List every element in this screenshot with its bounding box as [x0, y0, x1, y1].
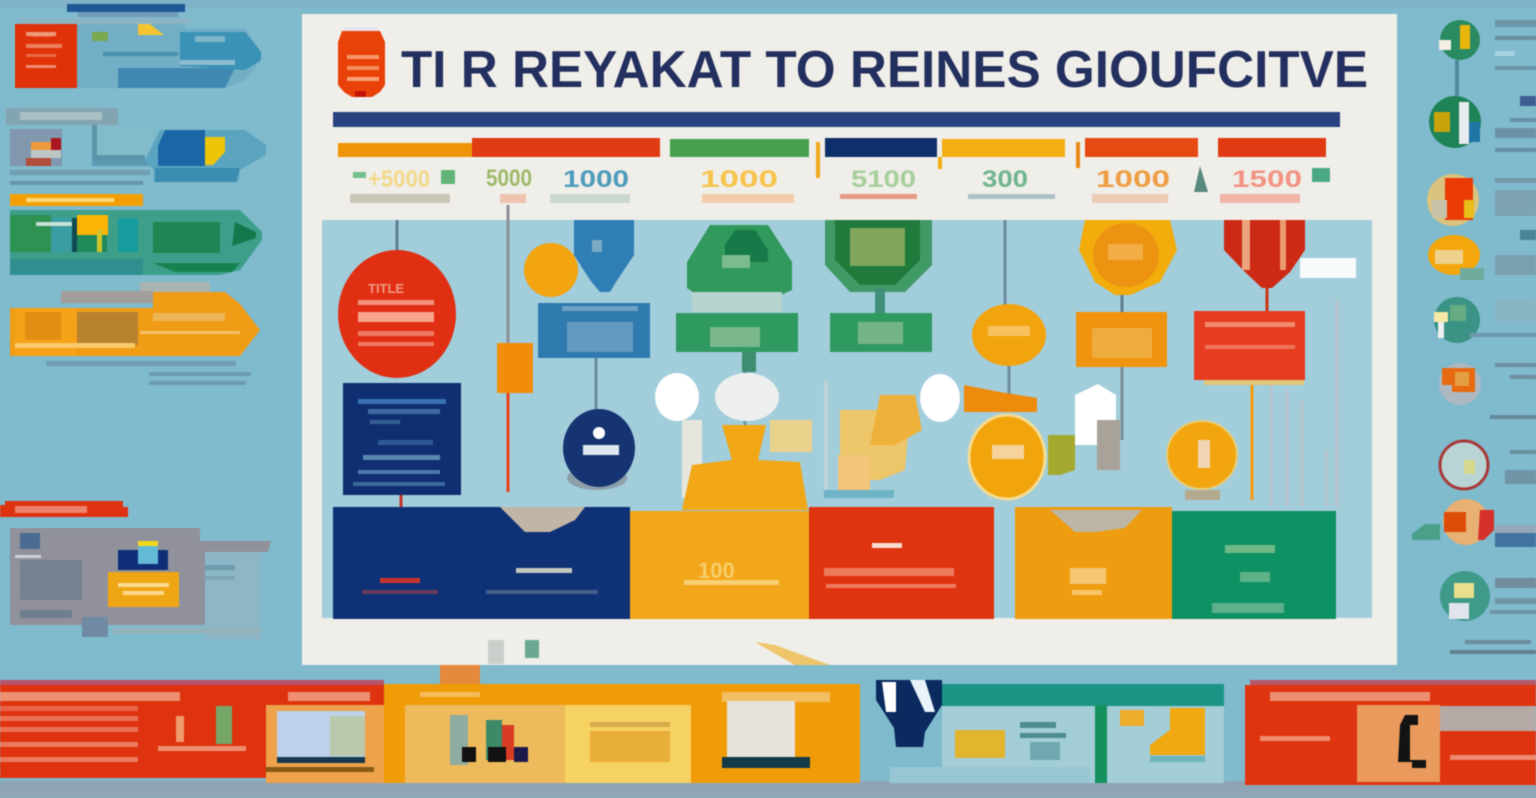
panel: bottom red section right — [1245, 680, 1536, 785]
header tabs — [338, 138, 1326, 178]
tab three — [670, 139, 809, 157]
icon: navy shield — [876, 680, 942, 747]
panel: bottom amber section — [384, 665, 860, 783]
panel: main sheet — [302, 14, 1397, 665]
tab five — [942, 139, 1065, 157]
panel: bottom strip — [0, 665, 1536, 798]
band: amber one — [630, 511, 809, 619]
icon: orange badge — [1427, 174, 1479, 226]
panel: left block three, amber label and green arrow — [10, 194, 262, 275]
icon: amber flask — [682, 425, 814, 530]
band: amber one: 100 — [698, 558, 735, 583]
header values: 1000 — [1096, 166, 1170, 193]
header values: 1500 — [1232, 166, 1302, 193]
tab two — [472, 138, 660, 157]
node: green shield one — [676, 225, 798, 372]
panel: bottom teal section — [890, 684, 1224, 783]
panel: left block one, red and blue — [15, 4, 261, 88]
panel: left block one, red and blue: REINES — [30, 33, 52, 39]
connector lines — [397, 205, 1267, 570]
text bars at right — [1450, 20, 1536, 654]
panel: inner chart background — [322, 220, 1372, 618]
panel: left column — [0, 4, 271, 640]
tab seven — [1218, 138, 1326, 157]
panel: left block five, red label and grey box — [0, 501, 271, 640]
icon: pale ring badge — [1440, 441, 1488, 489]
icon: kneeling figure — [1357, 705, 1440, 782]
icon: red-orange badge — [1412, 499, 1494, 545]
title rule — [333, 112, 1340, 127]
node: navy box — [343, 383, 461, 495]
tab one — [338, 143, 472, 157]
tab four — [825, 138, 937, 157]
node: navy circle — [563, 409, 635, 490]
band: amber two — [1015, 507, 1172, 619]
fine vertical lines at right — [1270, 300, 1339, 507]
node: red balloon — [1224, 220, 1356, 288]
panel: right column — [1412, 20, 1536, 654]
tab six — [1085, 138, 1198, 157]
node: orange shield three — [972, 304, 1046, 366]
panel: left block two, grey label and blue arrow — [6, 108, 266, 185]
band: red — [809, 507, 994, 619]
header values: 300 — [982, 166, 1028, 193]
node: red box — [1194, 311, 1305, 385]
bottom colour bands — [333, 507, 1336, 619]
icon: screen panel — [266, 705, 386, 783]
icon: document — [722, 701, 810, 768]
title: TI R REYAKAT TO REINES GIOUFCITVE — [401, 41, 1368, 99]
icon: orange and grey badge — [1439, 363, 1481, 405]
header values: 1000 — [563, 166, 629, 193]
icon: teal and yellow badge — [1440, 571, 1490, 621]
central burst of light shapes — [655, 373, 1120, 498]
icon: title lantern — [338, 27, 385, 97]
icon: amber badge — [1428, 235, 1484, 280]
icon: green and white badge — [1429, 96, 1481, 148]
header values — [368, 165, 1302, 193]
node: orange medallion small — [1167, 421, 1237, 500]
node: blue and orange pin — [524, 220, 634, 297]
header values: 5000 — [486, 165, 532, 192]
card: yellow — [565, 705, 691, 783]
panel: bottom red section — [0, 680, 386, 783]
header values: +5000 — [368, 166, 430, 193]
band: green — [1172, 511, 1336, 619]
icon: green and yellow badge — [1439, 20, 1480, 100]
node: red circle — [338, 250, 456, 378]
band: navy — [333, 507, 630, 619]
node: orange medallion — [964, 385, 1075, 499]
icon: bars on tan card — [405, 705, 565, 783]
node: orange connector tag — [497, 343, 533, 393]
header captions — [350, 166, 1330, 203]
node: blue box — [538, 303, 650, 358]
node: red circle: TITLE — [368, 281, 404, 296]
panel: left block four, amber arrow — [10, 282, 260, 385]
node: green shield two — [825, 220, 932, 352]
small icons at sheet foot — [488, 640, 830, 665]
node: amber badge — [1079, 220, 1177, 295]
header values: 1000 — [700, 166, 778, 193]
icon: green badge — [1434, 297, 1480, 343]
header values: 5100 — [851, 166, 916, 193]
node: amber box — [1076, 312, 1167, 367]
